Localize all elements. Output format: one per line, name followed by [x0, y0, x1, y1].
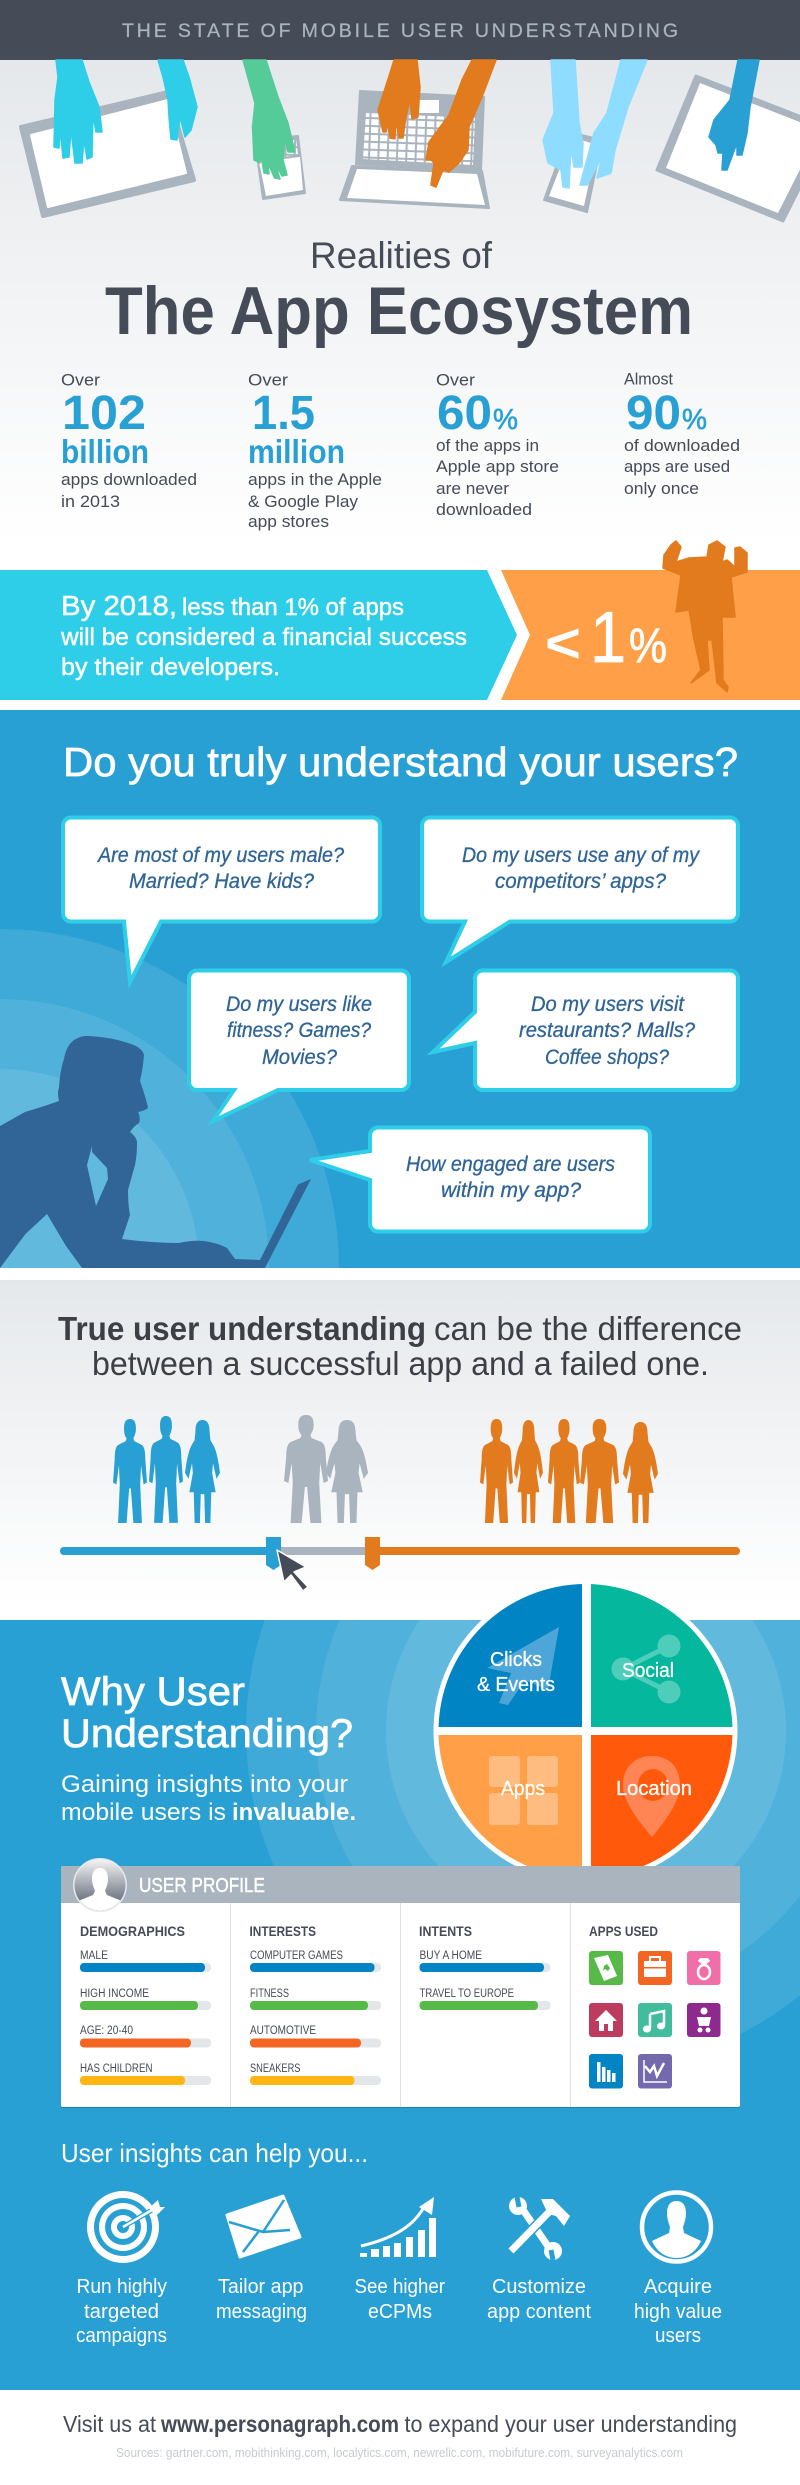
stat: 1.5 million: apps in the Apple	[248, 470, 382, 489]
quadrant: clicks and events: Clicks	[490, 1649, 542, 1671]
icon: green hand	[243, 60, 295, 179]
callout: engagement question: How engaged are users	[406, 1153, 615, 1176]
heading: Understanding?	[61, 1712, 353, 1756]
benefit: acquire users: users	[655, 2325, 701, 2347]
icon: right phone	[544, 132, 602, 212]
icon: house app	[589, 2003, 623, 2037]
banner arrow text: will be considered a financial success	[60, 624, 467, 651]
callout: competitors question: Do my users use any of my	[462, 844, 700, 867]
banner: financial success	[0, 541, 800, 700]
benefit: acquire users	[634, 2192, 722, 2347]
title: The App Ecosystem	[105, 273, 693, 349]
stat: 90 percent: only once	[624, 479, 699, 498]
silhouette: person at laptop	[0, 1036, 311, 1268]
banner arrow text: by their developers.	[61, 654, 280, 681]
benefit: tailor messaging: Tailor app	[218, 2276, 304, 2298]
icon: light blue hands	[543, 60, 647, 188]
benefit: targeted campaigns: targeted	[84, 2301, 159, 2323]
stat: 90 percent: apps are used	[624, 457, 730, 476]
icon: briefcase app	[638, 1951, 672, 1985]
quadrant: apps	[438, 1735, 582, 1866]
icon: cursor	[277, 1550, 308, 1591]
stat: 1.5 million: & Google Play	[248, 492, 358, 511]
benefit: customize content	[487, 2197, 591, 2323]
heading: Do you truly understand your users?	[63, 739, 738, 785]
column: demographics: DEMOGRAPHICS	[80, 1923, 185, 1939]
icon: growth chart	[360, 2197, 436, 2257]
stat: 90 percent: Almost	[624, 370, 673, 388]
quadrant: social	[591, 1584, 732, 1727]
banner less than one percent: %	[629, 620, 667, 673]
title	[105, 235, 693, 349]
column: demographics: HIGH INCOME	[80, 1988, 149, 2000]
column: intents: BUY A HOME	[420, 1950, 482, 1962]
panel: do you truly understand	[0, 710, 800, 1268]
stat: 60 percent: of the apps in	[436, 436, 539, 455]
pie: data types	[434, 1584, 738, 1866]
callout: places question	[433, 970, 738, 1090]
footer call to action: to expand your user understanding	[404, 2411, 737, 2437]
benefit: acquire users: high value	[634, 2301, 722, 2323]
column: apps used	[589, 1923, 720, 2088]
column: interests: SNEAKERS	[250, 2063, 301, 2075]
stat: 60 percent: are never	[436, 479, 509, 498]
icon: laptop	[340, 91, 489, 208]
panel: why user understanding	[0, 1584, 800, 2390]
heading: user insights: User insights can help you...	[61, 2138, 368, 2168]
callout: demographics question: Married? Have kids?	[129, 870, 314, 893]
column: demographics: HAS CHILDREN	[80, 2063, 152, 2075]
stat: 1.5 million: app stores	[248, 512, 329, 531]
slider track	[60, 1537, 740, 1570]
column: interests: FITNESS	[250, 1988, 289, 2000]
stat: 102 billion: 102	[62, 387, 146, 440]
column: demographics	[80, 1923, 211, 2085]
stat: 102 billion	[61, 370, 197, 511]
benefit: higher eCPMs: See higher	[354, 2276, 445, 2298]
column: demographics: MALE	[80, 1950, 108, 1962]
icon: right tablet	[657, 76, 800, 221]
column: interests: AUTOMOTIVE	[250, 2025, 316, 2037]
callout: engagement question	[310, 1128, 650, 1232]
icon: line chart app	[638, 2054, 672, 2088]
text block: gaining insights: invaluable.	[232, 1799, 356, 1826]
stat: 1.5 million	[248, 370, 382, 531]
quadrant: clicks and events: & Events	[477, 1674, 555, 1696]
callout: competitors question	[422, 818, 738, 962]
icon: envelope	[227, 2196, 300, 2257]
banner arrow text: less than 1% of apps	[182, 594, 404, 621]
callout: interests question: Do my users like	[226, 993, 372, 1016]
sources: Sources: gartner.com, mobithinking.com, localytics.com, newrelic.com, mobifuture.com, surveyanalytics.com	[116, 2445, 683, 2460]
callout: competitors question: competitors’ apps?	[495, 870, 666, 893]
icon: phone with keyboard	[255, 136, 305, 199]
callout: places question: Coffee shops?	[545, 1046, 669, 1069]
stat: 60 percent: %	[493, 404, 518, 436]
panel: intro	[0, 60, 800, 570]
footer call to action: Visit us at	[63, 2411, 157, 2437]
callout: demographics question	[63, 818, 380, 982]
stat: 102 billion: apps downloaded	[61, 470, 197, 489]
quadrant: location	[591, 1735, 732, 1866]
icon: music app	[638, 2003, 672, 2037]
column: interests: COMPUTER GAMES	[250, 1950, 343, 1962]
icon: wrench and hammer	[509, 2197, 570, 2260]
icon: person in circle	[642, 2192, 711, 2262]
panel: true user understanding	[0, 1280, 800, 1620]
benefit: tailor messaging	[216, 2196, 307, 2323]
callout: interests question: fitness? Games?	[227, 1019, 371, 1042]
benefit: higher eCPMs: eCPMs	[368, 2301, 432, 2323]
icon: ring app	[687, 1951, 720, 1985]
stat: 102 billion: billion	[61, 433, 149, 470]
heading: Why User	[61, 1670, 245, 1714]
benefit: targeted campaigns	[76, 2191, 167, 2347]
header bar	[0, 0, 800, 60]
column: intents: INTENTS	[419, 1923, 472, 1939]
stat: 1.5 million: Over	[248, 370, 288, 390]
stat: 60 percent: Apple app store	[436, 457, 559, 476]
stat: 90 percent: 90	[626, 387, 681, 440]
stat: 60 percent	[436, 370, 559, 519]
icon: bars app	[589, 2054, 623, 2088]
stat: 1.5 million: million	[248, 433, 345, 470]
people: blue group	[113, 1416, 220, 1523]
header bar: THE STATE OF MOBILE USER UNDERSTANDING	[122, 20, 678, 42]
banner less than one percent: <	[545, 611, 581, 674]
card title: USER PROFILE	[139, 1875, 265, 1897]
benefit: customize content: Customize	[492, 2276, 586, 2298]
heading: can be the difference	[434, 1310, 742, 1347]
banner arrow text	[0, 570, 517, 700]
icon: orange hands	[378, 60, 496, 187]
stat: 102 billion: in 2013	[61, 492, 120, 511]
people: orange group	[480, 1419, 658, 1523]
benefit: acquire users: Acquire	[644, 2276, 712, 2298]
callout: demographics question: Are most of my users male?	[96, 844, 344, 867]
callout: engagement question: within my app?	[441, 1179, 581, 1202]
column: interests: INTERESTS	[250, 1923, 316, 1939]
callout: interests question: Movies?	[262, 1046, 337, 1069]
quadrant: apps: Apps	[501, 1778, 545, 1800]
banner arrow text: By 2018,	[61, 590, 177, 621]
column: apps used: APPS USED	[589, 1923, 658, 1939]
footer call to action	[63, 2411, 737, 2437]
quadrant: social: Social	[622, 1660, 674, 1682]
icon: cyan hands	[54, 60, 197, 163]
column: intents	[419, 1923, 550, 2010]
text block: gaining insights: mobile users is	[61, 1799, 226, 1826]
stat: 1.5 million: 1.5	[252, 387, 315, 440]
concentric rings	[246, 1620, 800, 2034]
panel: user profile card	[61, 1858, 740, 2108]
icon: celebrating man	[663, 541, 747, 692]
stat: 90 percent: of downloaded	[624, 436, 740, 455]
text block: gaining insights	[61, 1771, 356, 1826]
column: demographics: AGE: 20-40	[80, 2025, 133, 2037]
banner less than one percent: 1	[590, 598, 626, 678]
footer call to action: www.personagraph.com	[160, 2411, 399, 2437]
benefit: customize content: app content	[487, 2301, 591, 2323]
heading	[58, 1310, 742, 1382]
heading: between a successful app and a failed one.	[92, 1345, 709, 1382]
concentric arcs	[0, 929, 339, 1268]
stat: 90 percent: %	[682, 404, 707, 436]
callout: interests question	[189, 970, 409, 1121]
heading	[61, 1670, 353, 1756]
people: grey group	[284, 1415, 368, 1523]
benefit: targeted campaigns: campaigns	[76, 2325, 167, 2347]
stat: 102 billion: Over	[61, 370, 100, 390]
benefit: higher eCPMs	[354, 2197, 445, 2323]
text block: gaining insights: Gaining insights into your	[61, 1771, 348, 1798]
quadrant: location: Location	[616, 1778, 692, 1800]
illustration: hands on devices	[21, 60, 800, 221]
icon: left tablet	[21, 92, 194, 216]
callout: places question: Do my users visit	[531, 993, 685, 1016]
benefit: targeted campaigns: Run highly	[76, 2276, 167, 2298]
stat: 90 percent	[624, 370, 740, 498]
stat: 60 percent: 60	[437, 387, 492, 440]
title: Realities of	[310, 235, 493, 276]
icon: target	[87, 2191, 165, 2263]
stat: 60 percent: downloaded	[436, 500, 532, 519]
banner less than one percent	[501, 570, 800, 700]
stat: 60 percent: Over	[436, 370, 475, 390]
icon: blue hand	[709, 60, 759, 170]
icon: baby app	[687, 2003, 720, 2037]
quadrant: clicks and events	[438, 1584, 582, 1727]
column: interests	[250, 1923, 381, 2085]
icon: cards app	[589, 1951, 623, 1985]
heading: True user understanding	[58, 1310, 426, 1347]
callout: places question: restaurants? Malls?	[519, 1019, 695, 1042]
column: intents: TRAVEL TO EUROPE	[420, 1988, 514, 2000]
icon: avatar	[73, 1858, 127, 1915]
benefit: tailor messaging: messaging	[216, 2301, 307, 2323]
